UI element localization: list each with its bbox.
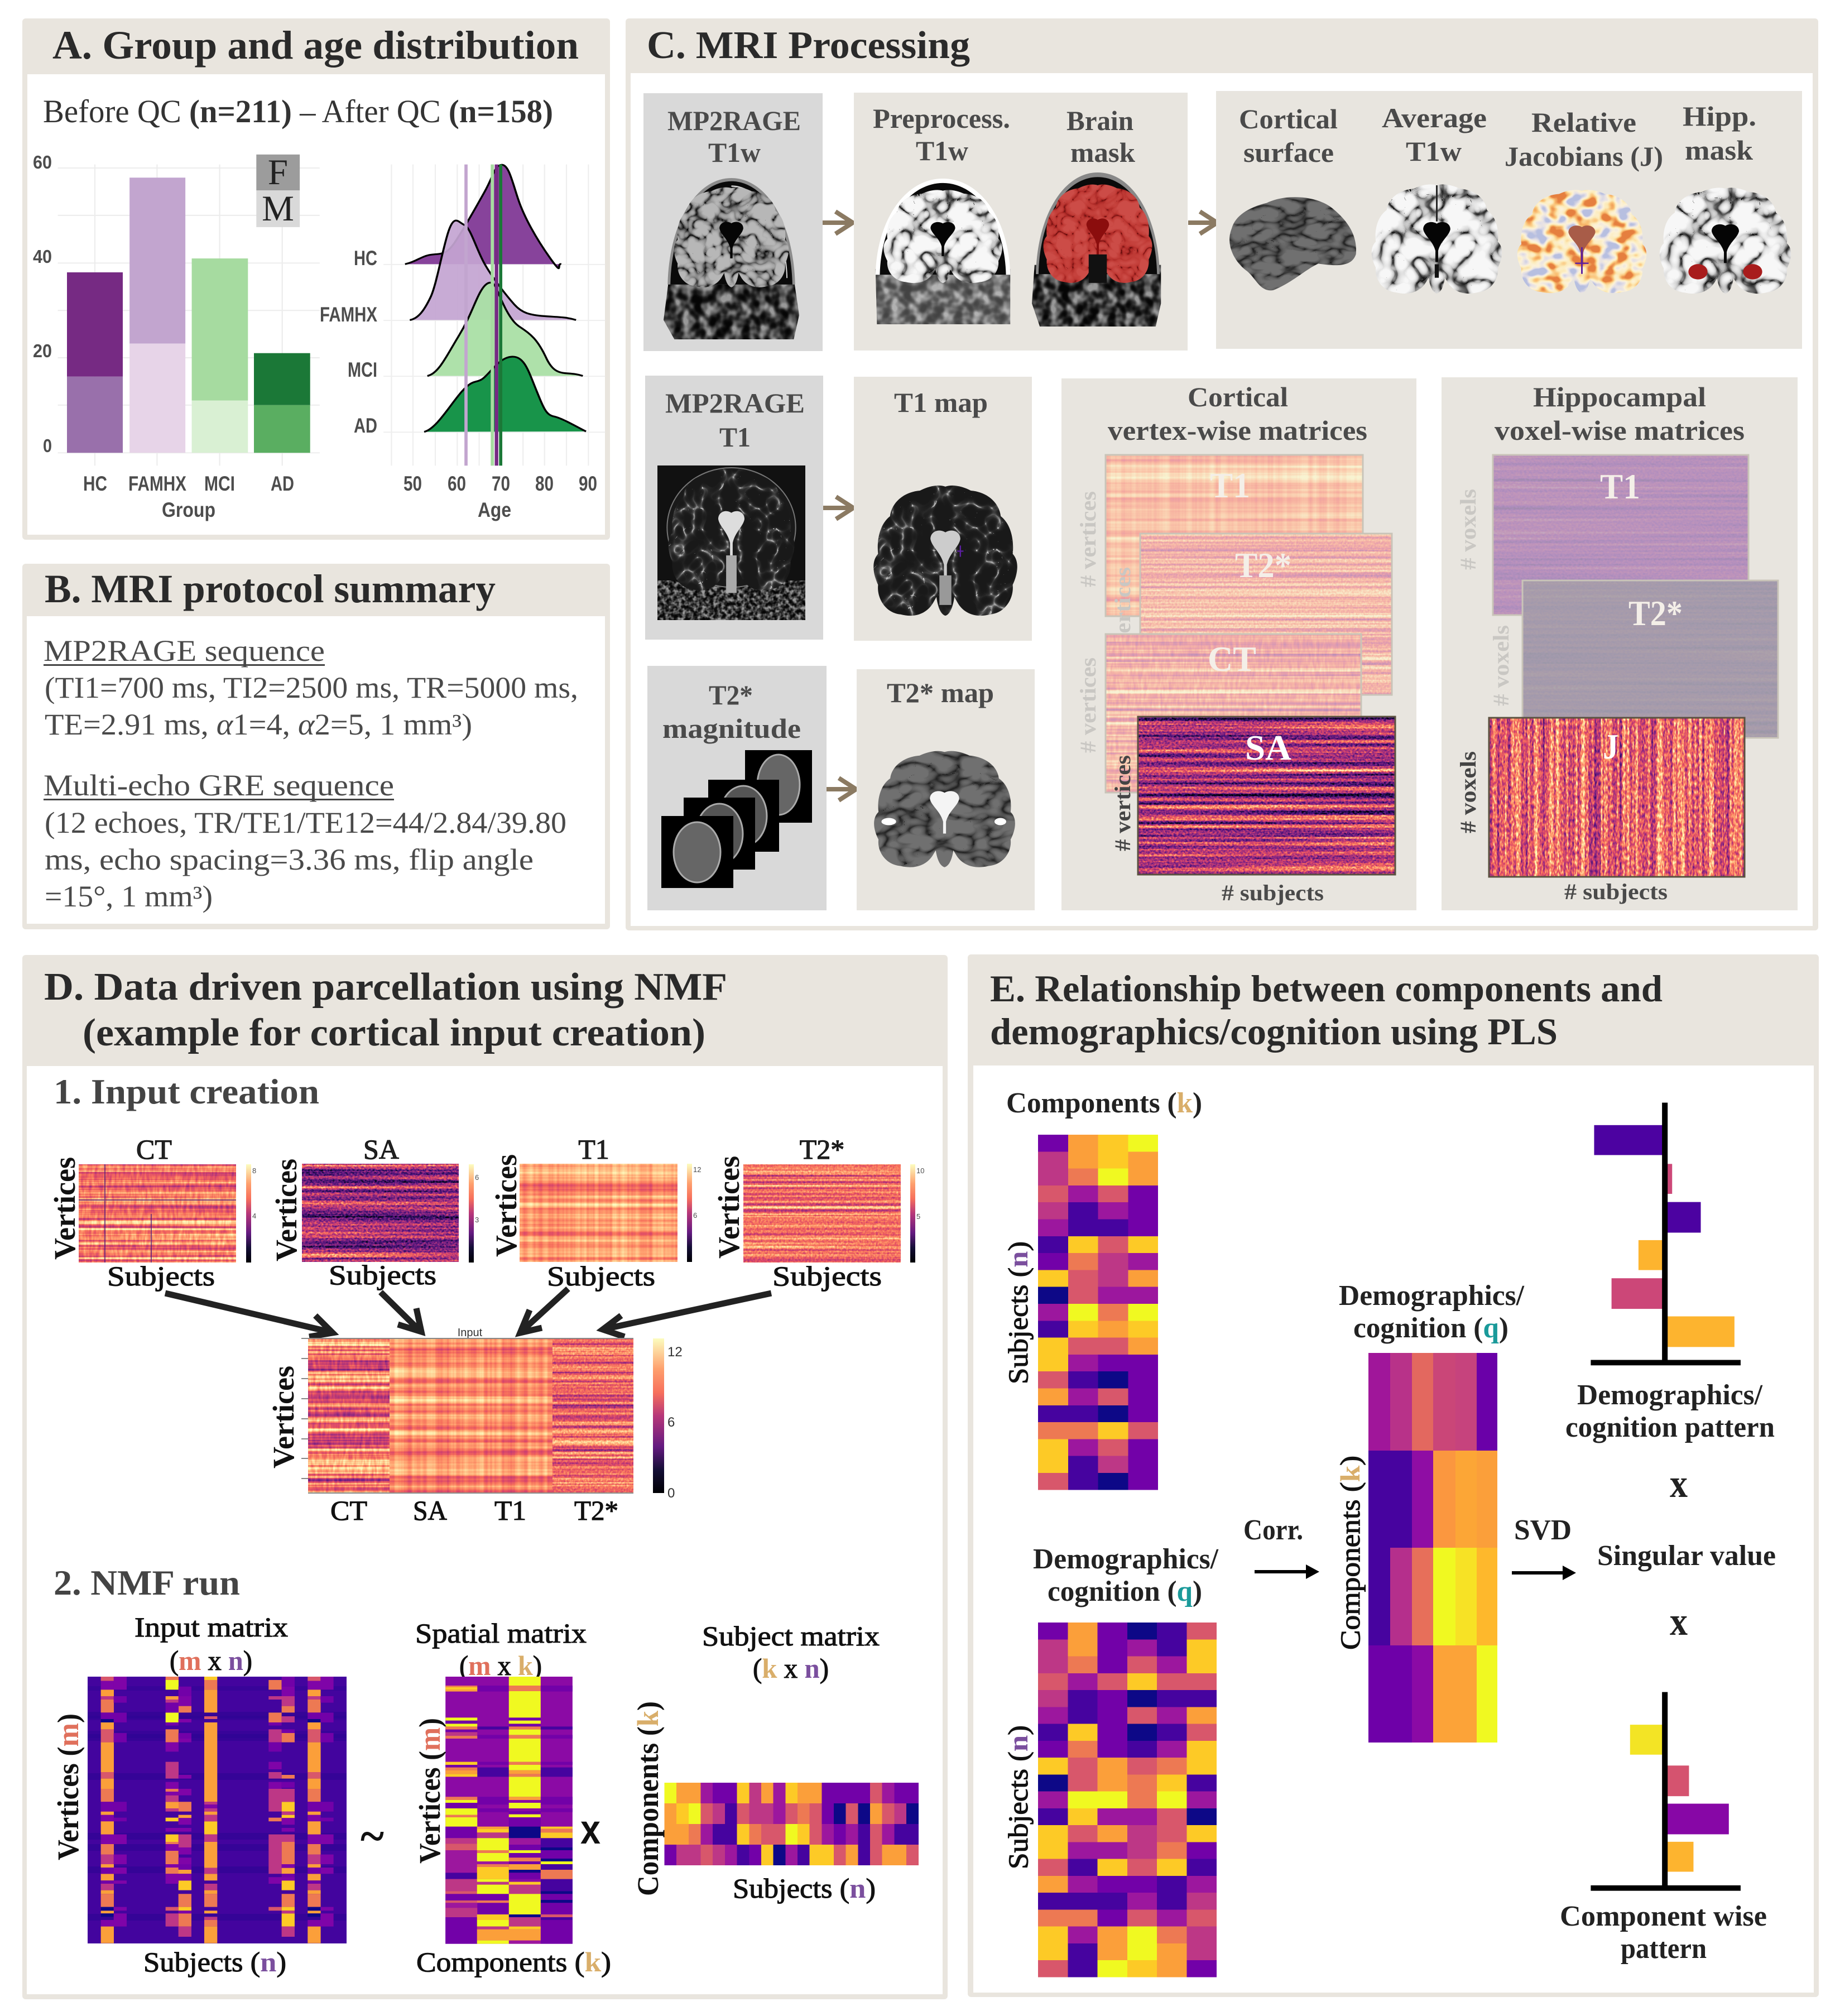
multi-echo GRE protocol text [44, 769, 566, 913]
heatmap: hippocampal T2*: T2* [1628, 593, 1683, 633]
input matrix m x n: Subjects (n) [143, 1946, 286, 1977]
panel A: group and age distribution [22, 18, 610, 540]
arrows into input matrix [165, 1289, 771, 1337]
ridge plot: age distribution: AD [354, 414, 377, 437]
bar chart: group distribution: 0 [43, 435, 52, 456]
box: T2* magnitude: T2* [709, 679, 753, 711]
ridge plot: age distribution: 60 [448, 472, 466, 495]
box: MP2RAGE T1w: T1w [708, 137, 761, 168]
singular value equation: Singular value [1597, 1540, 1776, 1572]
box: cortical surface, average T1w, Jacobians, hippocampal mask: surface [1243, 137, 1334, 168]
merged input heatmap: T1 [494, 1495, 526, 1526]
box: hippocampal voxel-wise matrices [1442, 377, 1798, 910]
heatmap: cortical T2*: T2* [1235, 545, 1291, 585]
small heatmap: T2* [712, 1134, 924, 1292]
box: preprocessed T1w and brain mask: Brain [1066, 105, 1133, 136]
heading E: E. Relationship between components and [990, 967, 1663, 1010]
box: preprocessed T1w and brain mask: T1w [916, 135, 968, 166]
MP2RAGE protocol text [44, 634, 578, 741]
small heatmap: CT: Subjects [107, 1260, 215, 1292]
input matrix m x n: Input matrix [134, 1611, 288, 1643]
heading E: demographics/cognition using PLS [990, 1010, 1558, 1053]
QC sample size line: Before QC (n=211) – After QC (n=158) [43, 93, 553, 129]
bar chart: group distribution: 60 [33, 152, 52, 172]
spatial matrix m x k: Spatial matrix [415, 1617, 587, 1649]
arrow [827, 778, 856, 800]
input matrix m x n [51, 1611, 347, 1977]
components matrix: Components (k) [1006, 1087, 1202, 1119]
small heatmap: CT [48, 1134, 256, 1292]
merged input heatmap: 0 [667, 1486, 675, 1501]
multi-echo GRE protocol text: (12 echoes, TR/TE1/TE12=44/2.84/39.80 [45, 806, 566, 839]
heatmap: cortical T2* [1140, 534, 1392, 695]
heading D [44, 966, 727, 1054]
box: cortical vertex-wise matrices: vertex-wise matrices [1108, 415, 1367, 446]
components matrix: Subjects (n) [1002, 1241, 1034, 1384]
arrow: SVD [1512, 1514, 1576, 1580]
merged input heatmap: 6 [667, 1415, 675, 1430]
sub-heading: NMF run: 2. NMF run [54, 1563, 240, 1602]
box: MP2RAGE T1: MP2RAGE [665, 387, 805, 419]
icon: relative Jacobians brain [1517, 190, 1646, 293]
box: T2* map [857, 669, 1035, 910]
spatial matrix m x k: (m x k) [459, 1650, 542, 1681]
approximately sign: ~ [361, 1809, 384, 1863]
multi-echo GRE protocol text: =15°, 1 mm³) [45, 880, 213, 913]
box: cortical surface, average T1w, Jacobians, hippocampal mask [1216, 91, 1802, 349]
box: T1 map: T1 map [894, 387, 988, 418]
box: hippocampal voxel-wise matrices: # voxels [1488, 625, 1514, 706]
heatmap: cortical thickness [1106, 634, 1361, 793]
heatmap: hippocampal T1 [1493, 455, 1748, 615]
spatial matrix m x k: Vertices (m) [413, 1718, 446, 1864]
heatmap: cortical T1 [1106, 455, 1363, 616]
ridge plot: age distribution: Age [478, 498, 511, 521]
heatmap: cortical thickness: CT [1208, 639, 1256, 679]
ridge plot: age distribution: 80 [535, 472, 554, 495]
heading B: B. MRI protocol summary [45, 567, 496, 611]
icon: hippocampal mask brain [1660, 188, 1791, 294]
box: cortical vertex-wise matrices: # vertices [1110, 755, 1135, 851]
box: preprocessed T1w and brain mask [854, 93, 1188, 351]
merged input heatmap: 12 [667, 1345, 683, 1360]
ridge plot: age distribution [320, 165, 605, 521]
spatial matrix m x k: Components ( k) [416, 1946, 611, 1977]
components matrix [1002, 1087, 1202, 1481]
bar chart: group distribution: AD [271, 472, 294, 495]
box: hippocampal voxel-wise matrices: # voxels [1455, 751, 1481, 833]
multiplication sign: x [580, 1806, 600, 1852]
box: cortical vertex-wise matrices: # vertices [1075, 491, 1101, 587]
ridge plot: age distribution: MCI [348, 358, 377, 381]
bar chart: group distribution: FAMHX [128, 472, 186, 495]
box: cortical surface, average T1w, Jacobians, hippocampal mask: Relative [1531, 107, 1636, 138]
spatial matrix m x k [413, 1617, 611, 1977]
multi-echo GRE protocol text: Multi-echo GRE sequence [44, 769, 394, 802]
ridge plot: age distribution: 50 [403, 472, 422, 495]
box: hippocampal voxel-wise matrices: # subjects [1564, 879, 1668, 904]
multi-echo GRE protocol text: ms, echo spacing=3.36 ms, flip angle [45, 843, 534, 876]
small heatmap: T1: Vertices [489, 1154, 523, 1257]
small heatmap: T1: 6 [693, 1211, 697, 1220]
box: cortical surface, average T1w, Jacobians, hippocampal mask: T1w [1406, 136, 1462, 167]
small heatmap: T2*: Vertices [712, 1156, 746, 1259]
small heatmap: T1: 12 [693, 1165, 701, 1174]
icon: cortical surface [1229, 197, 1356, 290]
subject matrix k x n [631, 1620, 919, 1904]
input matrix m x n: Vertices (m) [51, 1713, 85, 1860]
bar chart: group distribution: Group [162, 498, 215, 521]
correlation matrix: Components (k) [1334, 1456, 1366, 1650]
heading C: C. MRI Processing [647, 24, 970, 67]
small heatmap: CT: CT [136, 1134, 172, 1165]
heading A: A. Group and age distribution [52, 23, 579, 68]
box: MP2RAGE T1w: MP2RAGE [667, 105, 801, 136]
arrow [823, 497, 853, 519]
heatmap: hippocampal Jacobians [1489, 718, 1745, 877]
box: hippocampal voxel-wise matrices: Hippocampal [1533, 381, 1706, 412]
arrow [823, 212, 853, 234]
small heatmap: T1 [489, 1134, 701, 1292]
merged input heatmap: T2* [574, 1495, 618, 1526]
ridge plot: age distribution: 90 [579, 472, 597, 495]
box: preprocessed T1w and brain mask: Preprocess. [873, 103, 1010, 134]
box: cortical surface, average T1w, Jacobians, hippocampal mask: Jacobians (J) [1505, 141, 1663, 172]
MP2RAGE protocol text: MP2RAGE sequence [44, 634, 325, 668]
arrow [1188, 212, 1217, 234]
box: T2* map: T2* map [887, 677, 994, 708]
heatmap: surface area [1138, 717, 1395, 875]
sub-heading: input creation: 1. Input creation [54, 1072, 319, 1111]
bar chart: group distribution: M [262, 189, 294, 229]
bar chart: demographics/cognition pattern: cognition pattern [1565, 1412, 1775, 1443]
panel E: relationship between components and demographics/cognition using PLS [968, 954, 1819, 1997]
singular value equation: x [1670, 1461, 1688, 1506]
singular value equation: x [1670, 1599, 1688, 1644]
panel C: MRI processing [626, 18, 1818, 930]
box: cortical surface, average T1w, Jacobians, hippocampal mask: mask [1685, 135, 1753, 166]
ridge plot: age distribution: FAMHX [320, 303, 377, 326]
small heatmap: SA: 6 [475, 1173, 479, 1182]
singular value equation [1597, 1461, 1776, 1644]
heading E [990, 967, 1663, 1053]
demographics/cognition matrix: Subjects (n) [1002, 1725, 1034, 1869]
small heatmap: T2*: T2* [800, 1134, 844, 1165]
heading D: (example for cortical input creation) [83, 1011, 705, 1054]
small heatmap: T2*: 10 [916, 1167, 924, 1175]
demographics/cognition matrix: cognition (q) [1048, 1576, 1202, 1607]
arrow: correlation [1243, 1514, 1319, 1579]
box: T1 map [854, 377, 1032, 641]
bar chart: demographics/cognition pattern: Demographics/ [1577, 1379, 1763, 1411]
subject matrix k x n: Subject matrix [702, 1620, 880, 1652]
subject matrix k x n: (k x n) [753, 1653, 829, 1684]
icon: average T1w brain [1372, 184, 1502, 294]
box: MP2RAGE T1 [645, 376, 823, 640]
subject matrix k x n: Subjects (n) [733, 1873, 876, 1904]
box: hippocampal voxel-wise matrices: # voxels [1455, 489, 1481, 570]
subject matrix k x n: Components (k) [631, 1701, 665, 1896]
box: MP2RAGE T1w [643, 93, 823, 351]
merged input heatmap: Input [458, 1327, 483, 1339]
box: cortical vertex-wise matrices: # subjects [1222, 880, 1324, 905]
bar chart: group distribution [33, 152, 320, 521]
bar chart: group distribution: HC [83, 472, 107, 495]
input matrix m x n: (m x n) [170, 1645, 252, 1676]
heatmap: surface area: SA [1245, 728, 1291, 767]
small heatmap: CT: 8 [252, 1167, 256, 1175]
small heatmap: CT: 4 [252, 1212, 256, 1220]
bar chart: group distribution: 20 [33, 340, 52, 361]
ridge plot: age distribution: 70 [492, 472, 510, 495]
demographics/cognition matrix: Demographics/ [1033, 1543, 1219, 1575]
small heatmap: SA: Vertices [270, 1159, 303, 1261]
box: cortical surface, average T1w, Jacobians, hippocampal mask: Hipp. [1683, 100, 1756, 132]
bar chart: component wise pattern: Component wise [1560, 1900, 1767, 1932]
merged input heatmap [267, 1327, 683, 1526]
small heatmap: SA: SA [363, 1134, 399, 1165]
small heatmap: SA: 3 [475, 1216, 479, 1224]
box: cortical vertex-wise matrices [1061, 378, 1416, 910]
bar chart: group distribution: MCI [204, 472, 235, 495]
demographics/cognition matrix [1002, 1543, 1219, 1969]
heatmap: hippocampal Jacobians: J [1603, 727, 1618, 766]
merged input heatmap: Vertices [267, 1366, 300, 1468]
small heatmap: T2*: 5 [916, 1212, 920, 1221]
heatmap: cortical T1: T1 [1210, 465, 1250, 505]
box: hippocampal voxel-wise matrices: voxel-wise matrices [1495, 415, 1745, 446]
bar chart: group distribution: F [268, 152, 288, 193]
box: cortical vertex-wise matrices: # vertices [1110, 567, 1135, 663]
box: MP2RAGE T1: T1 [719, 421, 751, 453]
heatmap: hippocampal T2* [1522, 580, 1778, 738]
correlation matrix [1334, 1280, 1525, 1743]
correlation matrix: Demographics/ [1339, 1280, 1525, 1312]
small heatmap: T1: T1 [578, 1134, 609, 1165]
box: T2* magnitude: magnitude [662, 713, 801, 744]
small heatmap: T1: Subjects [547, 1260, 655, 1292]
correlation matrix: cognition (q) [1353, 1312, 1508, 1344]
merged input heatmap: CT [330, 1495, 367, 1526]
small heatmap: SA: Subjects [329, 1259, 436, 1290]
bar chart: group distribution: 40 [33, 246, 52, 267]
box: cortical vertex-wise matrices: Cortical [1188, 381, 1288, 412]
small heatmap: CT: Vertices [48, 1157, 81, 1260]
bar chart: component wise pattern [1560, 1692, 1767, 1965]
bar chart: component wise pattern: pattern [1621, 1933, 1707, 1965]
bar chart: demographics/cognition pattern [1565, 1103, 1775, 1443]
merged input heatmap: SA [413, 1495, 447, 1526]
box: cortical surface, average T1w, Jacobians, hippocampal mask: Cortical [1239, 103, 1338, 135]
heatmap: hippocampal T1: T1 [1600, 467, 1640, 506]
box: preprocessed T1w and brain mask: mask [1070, 137, 1135, 168]
ridge plot: age distribution: HC [354, 247, 377, 270]
small heatmap: T2*: Subjects [772, 1260, 882, 1292]
panel D: data driven parcellation using NMF [22, 955, 948, 1999]
panel B: MRI protocol summary [22, 564, 610, 929]
box: cortical vertex-wise matrices: # vertices [1075, 657, 1101, 753]
heading D: D. Data driven parcellation using NMF [44, 966, 727, 1009]
small heatmap: SA [270, 1134, 479, 1290]
MP2RAGE protocol text: (TI1=700 ms, TI2=2500 ms, TR=5000 ms, [45, 671, 578, 704]
box: cortical surface, average T1w, Jacobians, hippocampal mask: Average [1382, 102, 1487, 133]
arrow: SVD: SVD [1514, 1514, 1572, 1546]
arrow: correlation: Corr. [1243, 1514, 1303, 1546]
box: T2* magnitude [647, 666, 827, 910]
MP2RAGE protocol text: TE=2.91 ms, α1=4, α2=5, 1 mm³) [45, 708, 472, 741]
